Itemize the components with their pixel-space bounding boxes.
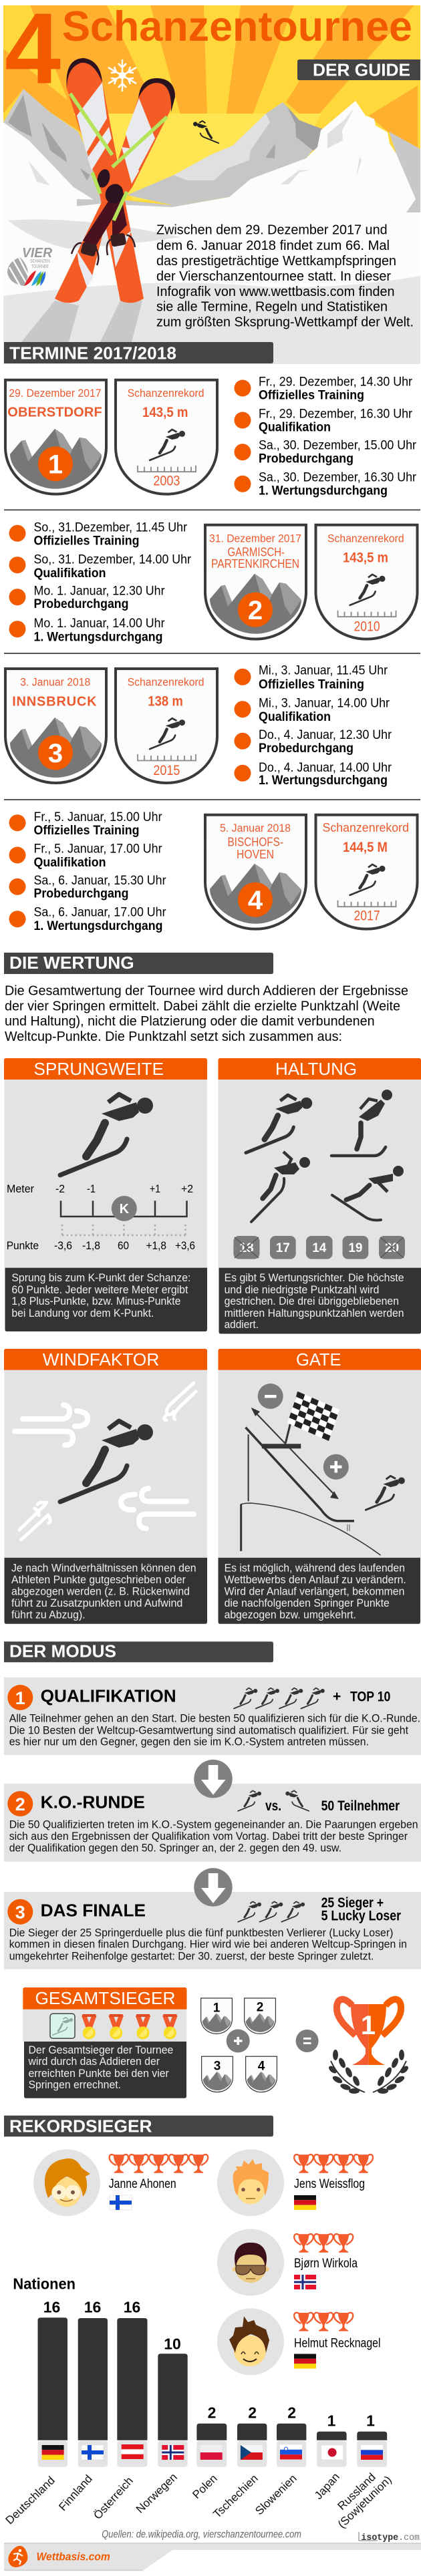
schedule: Garmisch: Mo. 1. Januar, 14.00 Uhr bbox=[33, 617, 165, 631]
header: SPRUNGWEITE bbox=[33, 1059, 164, 1079]
bar: Finnland 16: 16 bbox=[84, 2299, 101, 2316]
bar: Deutschland 16: 16 bbox=[43, 2299, 60, 2316]
shield: Bischofshofen bbox=[205, 815, 306, 929]
name: Janne Ahonen bbox=[109, 2177, 176, 2191]
shield: Garmisch: 2 bbox=[248, 596, 263, 625]
name: Bjørn Wirkola bbox=[294, 2257, 358, 2271]
panel: Bischofshofen bbox=[9, 810, 417, 933]
label: top 10: TOP 10 bbox=[350, 1689, 390, 1705]
text: Wertung intro: der vier Springen ermittelt. Dabei zählt die erzielte Punktzahl (Weite bbox=[5, 999, 400, 1013]
text box: Wird der Anlauf verlängert, bekommen bbox=[225, 1586, 404, 1598]
icon: jumper in sky bbox=[193, 121, 219, 143]
bar: Deutschland 16 bbox=[37, 2299, 67, 2467]
shield: record Bischofshofen: 2017 bbox=[354, 909, 380, 924]
shield: record Garmisch: Schanzenrekord bbox=[327, 532, 404, 545]
schedule: Oberstdorf: Probedurchgang bbox=[259, 452, 354, 466]
header bbox=[4, 1058, 207, 1080]
schedule: Garmisch: So., 31.Dezember, 11.45 Uhr bbox=[33, 521, 188, 535]
panel: Oberstdorf bbox=[5, 375, 417, 498]
label: 25 Sieger bbox=[321, 1895, 401, 1923]
subtitle tag: DER GUIDE bbox=[313, 60, 410, 80]
schedule: Innsbruck: Mi., 3. Januar, 11.45 Uhr bbox=[259, 664, 388, 678]
intro text bbox=[156, 223, 414, 330]
text box bbox=[218, 1558, 420, 1624]
bar: Tschechien 2 bbox=[237, 2404, 267, 2467]
shield: Garmisch: GARMISCH- bbox=[227, 546, 285, 559]
judges scores: 18 bbox=[239, 1241, 254, 1255]
text box: wird durch das Addieren der bbox=[28, 2056, 160, 2068]
scale diagram: -1 bbox=[87, 1182, 96, 1195]
text: Die Sieger der 25 Springerduelle plus die fünf punktbesten Verlierer (Lucky Loser) bbox=[9, 1927, 393, 1939]
text box: bei Landung vor dem K-Punkt. bbox=[11, 1307, 154, 1319]
schedule: Oberstdorf: Offizielles Training bbox=[259, 389, 364, 403]
badge 2: 2 bbox=[15, 1794, 25, 1814]
text: Wertung intro: Die Gesamtwertung der Tournee wird durch Addieren der Ergebnisse bbox=[5, 983, 408, 998]
panel: Gesamtsieger bbox=[23, 1987, 186, 2098]
schedule: Bischofshofen: Fr., 5. Januar, 15.00 Uhr bbox=[33, 810, 162, 824]
schedule: Bischofshofen: Qualifikation bbox=[33, 856, 106, 870]
text box: Es gibt 5 Wertungsrichter. Die höchste bbox=[225, 1272, 404, 1284]
bar: Japan 1 bbox=[317, 2412, 347, 2467]
schedule: Oberstdorf: 1. Wertungsdurchgang bbox=[259, 484, 388, 498]
text box: Athleten Punkte gutgeschrieben oder bbox=[11, 1574, 186, 1586]
avatar bbox=[45, 2158, 90, 2207]
shield: record Innsbruck bbox=[116, 669, 217, 783]
header: HALTUNG bbox=[275, 1059, 357, 1079]
schedule: Bischofshofen: 1. Wertungsdurchgang bbox=[33, 919, 163, 933]
diagram: four shields sum bbox=[201, 1998, 319, 2092]
left mountain bbox=[3, 89, 120, 214]
text box: abgezogen werden (z. B. Rückenwind bbox=[11, 1586, 190, 1598]
equals bbox=[296, 2030, 319, 2052]
title: Schanzentournee bbox=[62, 3, 412, 50]
logo: Vierschanzentournee: VIER bbox=[22, 246, 53, 261]
icon: jumper pose D bbox=[332, 1166, 404, 1220]
icon: skis bbox=[55, 58, 175, 303]
label: top 10 bbox=[333, 1689, 390, 1705]
heading: Termine bbox=[4, 342, 273, 363]
schedule: Oberstdorf: Fr., 29. Dezember, 16.30 Uhr bbox=[259, 407, 413, 421]
shield: Bischofshofen: HOVEN bbox=[237, 848, 274, 861]
judges scores: 20 bbox=[385, 1241, 399, 1255]
scale diagram bbox=[7, 1182, 195, 1252]
arrow: to K.O.-Runde bbox=[194, 1760, 233, 1798]
judges scores: 14 bbox=[312, 1241, 327, 1255]
panel: Windfaktor bbox=[4, 1349, 207, 1624]
text: Wertung intro bbox=[5, 983, 408, 1044]
shield: record Oberstdorf: 143,5 m bbox=[142, 405, 188, 420]
shield: Innsbruck bbox=[5, 669, 106, 783]
header: GESAMTSIEGER bbox=[35, 1988, 175, 2008]
shield 3 bbox=[202, 2056, 233, 2092]
text bbox=[9, 1819, 418, 1855]
shield: Oberstdorf: OBERSTDORF bbox=[7, 405, 102, 420]
badge 2 bbox=[7, 1791, 33, 1816]
icon: trophy with laurels bbox=[327, 1999, 410, 2094]
heading: Rekordsieger bbox=[4, 2116, 273, 2136]
flag: Norway bbox=[294, 2275, 316, 2289]
schedule: Innsbruck: Offizielles Training bbox=[259, 677, 364, 692]
record winner: Helmut Recknagel bbox=[217, 2308, 381, 2375]
intro text: Infografik von www.wettbasis.com finden bbox=[156, 285, 394, 299]
heading: Die Wertung bbox=[4, 953, 273, 974]
plus bbox=[227, 2030, 250, 2052]
icon: jumper pose C bbox=[251, 1152, 310, 1222]
icon: ramp with flag bbox=[241, 1392, 381, 1555]
intro text: der Vierschanzentournee statt. In dieser bbox=[156, 269, 391, 284]
panel: Haltung bbox=[218, 1058, 421, 1333]
record winner: Jens Weissflog bbox=[217, 2149, 373, 2216]
badge 3: 3 bbox=[15, 1903, 25, 1923]
heading: Die Wertung: DIE WERTUNG bbox=[9, 953, 134, 973]
schedule: Oberstdorf: Qualifikation bbox=[259, 421, 331, 435]
shield 2: 2 bbox=[257, 2001, 263, 2015]
text box: Wettbewerbs den Anlauf zu verändern. bbox=[225, 1574, 406, 1586]
heading: Termine: TERMINE 2017/2018 bbox=[9, 343, 176, 363]
text box: Der Gesamtsieger der Tournee bbox=[28, 2044, 173, 2056]
shield: Bischofshofen: 4 bbox=[248, 886, 263, 915]
trophies bbox=[294, 2234, 353, 2253]
icon: jumpers bbox=[234, 1688, 325, 1708]
schedule: Innsbruck: 1. Wertungsdurchgang bbox=[259, 774, 388, 788]
icon: minus bbox=[258, 1384, 283, 1409]
panel: Garmisch-Partenkirchen bbox=[9, 521, 417, 644]
brand name: Wettbasis.com bbox=[36, 2551, 110, 2563]
heading: Nationen: Nationen bbox=[13, 2275, 76, 2293]
icon: jumper pose A bbox=[246, 1095, 312, 1153]
footer band bbox=[4, 2543, 421, 2571]
schedule: Oberstdorf: Fr., 29. Dezember, 14.30 Uhr bbox=[259, 375, 413, 389]
shield: Oberstdorf: 29. Dezember 2017 bbox=[9, 387, 101, 399]
logo: Vierschanzentournee bbox=[7, 246, 53, 286]
country labels: Slowenien bbox=[253, 2472, 299, 2517]
schedule: Bischofshofen: Sa., 6. Januar, 15.30 Uhr bbox=[33, 874, 166, 888]
label: 25 Sieger: 25 Sieger + bbox=[321, 1895, 384, 1911]
text box: 1,8 Plus-Punkte, bzw. Minus-Punkte bbox=[11, 1295, 180, 1307]
logo: Vierschanzentournee: SCHANZEN bbox=[30, 259, 50, 264]
shield: Garmisch bbox=[205, 525, 306, 639]
heading: DAS FINALE bbox=[41, 1900, 146, 1920]
bar: Polen 2: 2 bbox=[208, 2404, 216, 2421]
intro text: zum größten Sksprung-Wettkampf der Welt. bbox=[156, 315, 414, 330]
shield: record Garmisch bbox=[315, 525, 417, 639]
record winner: Bjørn Wirkola bbox=[217, 2229, 358, 2295]
logo: Vierschanzentournee: TOURNEE bbox=[31, 265, 49, 269]
shield 1: 1 bbox=[213, 2001, 221, 2016]
country labels: Polen bbox=[190, 2472, 220, 2501]
source line: Quellen: de.wikipedia.org, vierschanzentournee.com bbox=[102, 2529, 301, 2540]
text box: Sprung bis zum K-Punkt der Schanze: bbox=[11, 1272, 190, 1284]
arrow: to Finale bbox=[194, 1868, 233, 1907]
shield: record Innsbruck: 138 m bbox=[148, 694, 183, 709]
bar: Tschechien 2: 2 bbox=[248, 2404, 257, 2421]
text box: die nachfolgenden Springer Punkte bbox=[225, 1597, 390, 1609]
text: der Qualifikation gegen den 50. Springer an, der 2. gegen den 49. usw. bbox=[9, 1842, 341, 1855]
text box: Springen errechnet. bbox=[28, 2079, 121, 2091]
schedule: Garmisch: Mo. 1. Januar, 12.30 Uhr bbox=[33, 585, 165, 599]
country labels: Österreich bbox=[91, 2474, 136, 2522]
label: 25 Sieger: 5 Lucky Loser bbox=[321, 1908, 401, 1923]
trophies bbox=[294, 2154, 373, 2173]
country labels bbox=[3, 2470, 394, 2531]
scale diagram: +1 bbox=[150, 1182, 160, 1195]
scale diagram: K bbox=[120, 1202, 130, 1217]
name: Jens Weissflog bbox=[294, 2177, 365, 2191]
schedule: Bischofshofen: Sa., 6. Januar, 17.00 Uhr bbox=[33, 906, 166, 920]
text: umgekehrter Reihenfolge gestartet: Der 30. zuerst, der beste Springer zuletzt. bbox=[9, 1950, 374, 1962]
header bbox=[218, 1349, 421, 1370]
hero panel bbox=[3, 0, 420, 364]
country labels: Tschechien bbox=[210, 2472, 261, 2521]
shield: Garmisch: 31. Dezember 2017 bbox=[209, 532, 301, 545]
scale diagram: 60 bbox=[118, 1239, 129, 1252]
icon: wind bbox=[15, 1383, 196, 1540]
schedule: Innsbruck: Qualifikation bbox=[259, 710, 331, 724]
schedule: Garmisch: Offizielles Training bbox=[33, 534, 139, 548]
shield: Innsbruck: INNSBRUCK bbox=[12, 695, 97, 709]
scale diagram: -1,8 bbox=[82, 1239, 100, 1252]
schedule: Garmisch bbox=[9, 521, 192, 644]
schedule: Bischofshofen bbox=[9, 810, 166, 933]
text box: Je nach Windverhältnissen können den bbox=[11, 1563, 196, 1575]
header bbox=[218, 1058, 421, 1080]
heading: K.O.-RUNDE bbox=[41, 1792, 145, 1812]
schedule: Bischofshofen: Probedurchgang bbox=[33, 887, 128, 901]
shield: Innsbruck: 3. Januar 2018 bbox=[20, 676, 90, 689]
country labels: Finnland bbox=[56, 2472, 95, 2513]
shield: Bischofshofen: BISCHOFS- bbox=[227, 836, 283, 849]
scale diagram: Meter bbox=[7, 1182, 34, 1195]
shield: record Garmisch: 143,5 m bbox=[343, 550, 388, 566]
shield: Garmisch: PARTENKIRCHEN bbox=[211, 557, 299, 571]
shield: record Bischofshofen: Schanzenrekord bbox=[322, 820, 409, 834]
label: 50 Teilnehmer: 50 Teilnehmer bbox=[321, 1798, 400, 1814]
text box: führt zu Abzug). bbox=[11, 1609, 86, 1621]
panel: Sprungweite bbox=[4, 1058, 207, 1331]
shield: record Innsbruck: 2015 bbox=[153, 763, 180, 778]
bar: Österreich 16: 16 bbox=[124, 2299, 140, 2316]
label: top 10: + bbox=[333, 1689, 341, 1704]
shield: record Oberstdorf bbox=[116, 380, 217, 494]
scale diagram: Punkte bbox=[7, 1239, 39, 1252]
heading: QUALIFIKATION bbox=[41, 1685, 176, 1706]
schedule: Garmisch: So,. 31. Dezember, 14.00 Uhr bbox=[33, 553, 192, 567]
name: Helmut Recknagel bbox=[294, 2336, 381, 2350]
text: Wertung intro: und Haltung), nicht die Platzierung oder die damit verbundenen bbox=[5, 1014, 375, 1029]
scale diagram: +3,6 bbox=[175, 1239, 195, 1252]
schedule: Oberstdorf bbox=[234, 375, 417, 498]
flag: Germany bbox=[294, 2354, 316, 2369]
text: Die 10 Besten der Weltcup-Gesamtwertung sind automatisch qualifiziert. Für sie geht bbox=[9, 1725, 408, 1737]
country labels: (Sowjetunion) bbox=[335, 2473, 394, 2531]
bar: Norwegen 10: 10 bbox=[164, 2336, 181, 2353]
icon: jumper versus bbox=[238, 1790, 309, 1814]
panel: Innsbruck bbox=[5, 664, 392, 788]
header: WINDFAKTOR bbox=[43, 1349, 159, 1370]
panel: Das Finale bbox=[4, 1892, 421, 1969]
background rays bbox=[3, 5, 420, 364]
trophies bbox=[110, 2154, 208, 2173]
shield: Oberstdorf: 1 bbox=[48, 450, 63, 480]
schedule: Innsbruck: Do., 4. Januar, 12.30 Uhr bbox=[259, 728, 392, 742]
text box bbox=[24, 2042, 186, 2098]
icon: jumper tile bbox=[50, 2014, 75, 2038]
trophies bbox=[294, 2313, 353, 2331]
bar: Japan 1: 1 bbox=[327, 2412, 336, 2430]
icon: trophy with laurels: 1 bbox=[361, 2011, 376, 2040]
shield: record Oberstdorf: Schanzenrekord bbox=[128, 387, 204, 399]
avatar bbox=[233, 2159, 269, 2205]
country labels: Deutschland bbox=[3, 2474, 57, 2527]
schedule: Innsbruck: Mi., 3. Januar, 14.00 Uhr bbox=[259, 697, 390, 711]
judges scores: 17 bbox=[276, 1241, 290, 1255]
heading: Rekordsieger: REKORDSIEGER bbox=[9, 2116, 152, 2136]
scale diagram: -2 bbox=[55, 1182, 65, 1195]
icon: jumper pose B bbox=[331, 1090, 392, 1156]
icon: small jumper bbox=[366, 1476, 405, 1510]
schedule: Innsbruck: Do., 4. Januar, 14.00 Uhr bbox=[259, 761, 392, 775]
bar chart: nations bbox=[3, 2299, 394, 2531]
judges scores: 19 bbox=[348, 1241, 362, 1255]
text box: führt zu Zusatzpunkten und Aufwind bbox=[11, 1597, 182, 1609]
text box: Es ist möglich, während des laufenden bbox=[225, 1563, 405, 1575]
text: sich aus den Ergebnissen der Qualifikation vom Vortag. Dabei tritt der beste Springer bbox=[9, 1830, 408, 1842]
schedule: Garmisch: Probedurchgang bbox=[33, 597, 128, 611]
header: GATE bbox=[296, 1349, 341, 1370]
text: es hier nur um den Gegner, gegen den sie im K.O.-System antreten müssen. bbox=[9, 1736, 369, 1748]
text box: 60 Punkte. Jeder weitere Meter ergibt bbox=[11, 1284, 188, 1296]
shield 2 bbox=[245, 1998, 275, 2034]
header bbox=[4, 1349, 207, 1370]
scale diagram: +2 bbox=[181, 1182, 193, 1195]
text: kommen in diesen finalen Durchgang. Hier wird wie bei anderen Weltcup-Springen in bbox=[9, 1939, 407, 1951]
shield 3: 3 bbox=[214, 2060, 221, 2074]
right mountains bbox=[3, 101, 420, 321]
icon: jumpers bbox=[238, 1901, 305, 1922]
country labels: Japan bbox=[312, 2470, 342, 2502]
text box: gestrichen. Die drei übriggebliebenen bbox=[225, 1295, 399, 1307]
bar: Russland 1 bbox=[357, 2412, 387, 2467]
schedule: Innsbruck bbox=[234, 664, 392, 788]
text box: addiert. bbox=[225, 1319, 259, 1331]
shield: record Innsbruck: Schanzenrekord bbox=[128, 676, 204, 689]
flag: Finland bbox=[110, 2195, 132, 2210]
judges scores bbox=[233, 1236, 405, 1259]
shield 4 bbox=[246, 2056, 277, 2092]
avatar bbox=[229, 2316, 269, 2366]
badge 1: 1 bbox=[15, 1688, 25, 1708]
intro text: Zwischen dem 29. Dezember 2017 und bbox=[156, 223, 388, 238]
bar: Norwegen 10 bbox=[158, 2336, 188, 2467]
schedule: Garmisch: Qualifikation bbox=[33, 567, 106, 581]
bar: Slowenien 2 bbox=[277, 2404, 306, 2467]
icon: snowflake bbox=[108, 59, 136, 92]
text box: mittleren Haltungspunktzahlen werden bbox=[225, 1307, 404, 1319]
schedule: Bischofshofen: Fr., 5. Januar, 17.00 Uhr bbox=[33, 842, 162, 856]
shield: record Oberstdorf: 2003 bbox=[153, 474, 180, 489]
flag: Germany bbox=[294, 2195, 316, 2210]
icon: jumper versus: vs. bbox=[265, 1798, 281, 1814]
icon: plus bbox=[323, 1454, 349, 1480]
text box: abgezogen bzw. umgekehrt. bbox=[225, 1609, 356, 1621]
credit: isotype: isotype.com bbox=[361, 2533, 420, 2543]
shield: Bischofshofen: 5. Januar 2018 bbox=[220, 822, 291, 834]
badge 3 bbox=[7, 1899, 33, 1925]
intro text: das prestigeträchtige Wettkampfspringen bbox=[156, 254, 396, 269]
shield 4: 4 bbox=[258, 2060, 265, 2074]
logo: Wettbasis bbox=[8, 2546, 27, 2567]
country labels: Russland bbox=[335, 2470, 378, 2513]
scale diagram: -3,6 bbox=[54, 1239, 72, 1252]
shield: Oberstdorf bbox=[5, 380, 106, 494]
scale diagram: +1,8 bbox=[146, 1239, 166, 1252]
shield: record Bischofshofen: 144,5 M bbox=[343, 840, 388, 855]
shield: Innsbruck: 3 bbox=[48, 739, 63, 768]
shield 1 bbox=[201, 1998, 232, 2034]
schedule: Garmisch: 1. Wertungsdurchgang bbox=[33, 630, 163, 644]
shield: record Garmisch: 2010 bbox=[354, 619, 380, 634]
bar: Polen 2 bbox=[196, 2404, 227, 2467]
text box bbox=[219, 1268, 421, 1333]
text bbox=[9, 1712, 420, 1748]
intro text: sie alle Termine, Regeln und Statistiken bbox=[156, 299, 388, 314]
bar: Russland 1: 1 bbox=[366, 2412, 375, 2430]
heading: Der Modus bbox=[4, 1641, 273, 1662]
icon: jumper bbox=[60, 1421, 153, 1502]
text box bbox=[4, 1558, 207, 1624]
icon: medals bbox=[82, 2014, 176, 2039]
text bbox=[9, 1927, 407, 1962]
intro text: dem 6. Januar 2018 findet zum 66. Mal bbox=[156, 238, 390, 253]
bar: Slowenien 2: 2 bbox=[287, 2404, 296, 2421]
badge 1 bbox=[7, 1685, 33, 1710]
bar: Österreich 16 bbox=[117, 2299, 147, 2467]
avatar bbox=[233, 2243, 269, 2283]
schedule: Innsbruck: Probedurchgang bbox=[259, 742, 354, 756]
text box: und die niedrigste Punktzahl wird bbox=[225, 1284, 379, 1296]
bar: Finnland 16 bbox=[78, 2299, 108, 2467]
icon: jumper bbox=[60, 1094, 153, 1175]
country labels: Norwegen bbox=[134, 2470, 180, 2516]
text box bbox=[5, 1268, 207, 1331]
panel: Gate bbox=[218, 1349, 421, 1624]
record winner: Janne Ahonen bbox=[33, 2149, 208, 2216]
shield: record Bischofshofen bbox=[315, 815, 417, 929]
schedule: Bischofshofen: Offizielles Training bbox=[33, 824, 139, 838]
panel: K.O.-Runde bbox=[4, 1784, 421, 1862]
snowfields bbox=[3, 219, 420, 364]
text box: erreichten Punkte bei den vier bbox=[28, 2068, 169, 2080]
panel: Qualifikation bbox=[4, 1677, 421, 1755]
text: Wertung intro: Weltcup-Punkte. Die Punktzahl setzt sich zusammen aus: bbox=[5, 1029, 342, 1044]
heading: Der Modus: DER MODUS bbox=[9, 1641, 116, 1661]
